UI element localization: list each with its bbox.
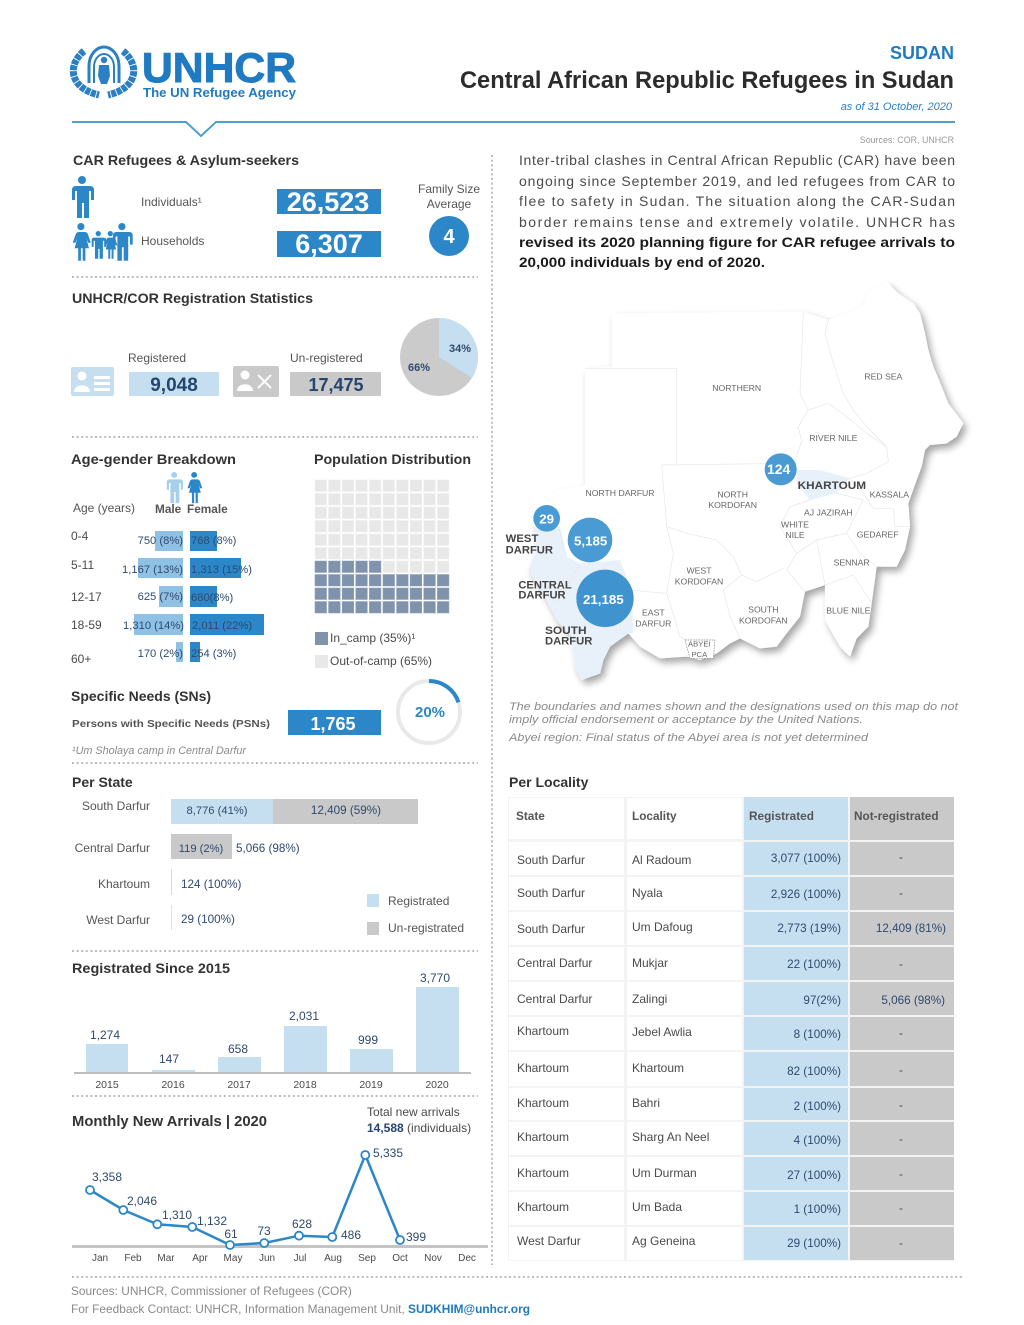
table states: Khartoum bbox=[517, 1096, 569, 1110]
highlighted state labels bbox=[506, 480, 866, 647]
bubbles: 29 bbox=[539, 511, 554, 526]
table not-registrated values: - bbox=[899, 1236, 903, 1250]
panel: registrated since 2015 bbox=[72, 960, 471, 1091]
state labels: BLUE NILE bbox=[826, 605, 871, 615]
donut chart bbox=[398, 681, 460, 743]
table header: State bbox=[516, 809, 545, 823]
table registrated values: 27 (100%) bbox=[787, 1169, 841, 1182]
population pyramid: 680(8%) bbox=[191, 592, 234, 604]
icon: UNHCR wreath and sheltering hands bbox=[73, 47, 134, 95]
line chart: 61 bbox=[224, 1227, 238, 1241]
highlighted state labels: KHARTOUM bbox=[798, 480, 866, 492]
axis labels bbox=[73, 501, 228, 516]
table localities: Nyala bbox=[632, 886, 663, 900]
axis labels: Male bbox=[155, 502, 182, 516]
table not-registrated values: - bbox=[899, 1026, 903, 1040]
map disclaimer: imply official endorsement or acceptance by the United Nations. bbox=[509, 714, 863, 726]
table states: Khartoum bbox=[517, 1200, 569, 1214]
population pyramid bbox=[71, 529, 264, 666]
row: Khartoum: Khartoum bbox=[98, 877, 150, 891]
state labels bbox=[585, 371, 909, 659]
table localities: Ag Geneina bbox=[632, 1234, 696, 1248]
row: Central Darfur: 119 (2%) bbox=[179, 843, 224, 855]
table header: Locality bbox=[632, 809, 677, 823]
icon: registered card bbox=[71, 367, 114, 396]
stat: PSNs bbox=[288, 710, 381, 735]
line chart: 2,046 bbox=[127, 1194, 157, 1208]
population pyramid: 12-17 bbox=[71, 590, 102, 604]
heading: UNHCR/COR Registration Statistics bbox=[72, 290, 313, 306]
line chart: 1,132 bbox=[197, 1214, 227, 1228]
line chart: 486 bbox=[341, 1228, 361, 1242]
map disclaimer: The boundaries and names shown and the designations used on this map do not bbox=[509, 701, 959, 713]
date: as of 31 October, 2020 bbox=[841, 101, 953, 113]
line chart: Dec bbox=[458, 1253, 476, 1264]
bubbles: 5,185 bbox=[574, 533, 608, 548]
table states: South Darfur bbox=[517, 886, 585, 900]
stat: PSNs: 1,765 bbox=[310, 714, 356, 734]
icon: female bbox=[187, 472, 202, 503]
line chart: 3,358 bbox=[92, 1170, 122, 1184]
line chart: Apr bbox=[192, 1253, 208, 1264]
intro paragraph bbox=[519, 152, 955, 270]
heading: Specific Needs (SNs) bbox=[71, 688, 211, 704]
line chart: 1,310 bbox=[162, 1208, 192, 1222]
population pyramid: 1,310 (14%) bbox=[123, 620, 184, 632]
bubbles bbox=[533, 453, 797, 627]
highlighted state labels: CENTRAL bbox=[518, 579, 572, 591]
bubbles: 124 bbox=[767, 461, 791, 477]
population pyramid: 750 (8%) bbox=[138, 535, 183, 547]
intro paragraph: flee to safety in Sudan. The situation along the CAR-Sudan bbox=[519, 193, 955, 209]
table registrated values: 2,926 (100%) bbox=[771, 888, 841, 901]
footnote: ¹Um Sholaya camp in Central Darfur bbox=[72, 745, 246, 757]
line chart: Oct bbox=[392, 1253, 408, 1264]
table localities: Um Durman bbox=[632, 1166, 697, 1180]
population pyramid: 60+ bbox=[71, 652, 91, 666]
table states: South Darfur bbox=[517, 853, 585, 867]
highlighted state labels: WEST bbox=[506, 533, 538, 545]
state labels: RED SEA bbox=[864, 371, 903, 381]
stat: individuals: 26,523 bbox=[287, 187, 369, 217]
logo tagline: The UN Refugee Agency bbox=[143, 85, 297, 100]
highlighted state labels: DARFUR bbox=[506, 544, 553, 556]
waffle legend bbox=[315, 631, 432, 668]
state labels: PCA bbox=[691, 650, 708, 659]
row: West Darfur: 29 (100%) bbox=[181, 913, 235, 926]
state labels: KASSALA bbox=[870, 489, 909, 499]
state labels: NORTH bbox=[717, 490, 748, 500]
population pyramid: 0-4 bbox=[71, 529, 89, 543]
table not-registrated values bbox=[876, 850, 946, 1250]
intro paragraph: revised its 2020 planning figure for CAR refugee arrivals to bbox=[519, 234, 955, 250]
table localities: Mukjar bbox=[632, 956, 668, 970]
heading: CAR Refugees & Asylum-seekers bbox=[73, 152, 299, 168]
total arrivals note: Total new arrivals bbox=[367, 1105, 460, 1119]
bar chart: 2019 bbox=[359, 1079, 383, 1091]
stat: registered: 9,048 bbox=[150, 375, 198, 396]
table registrated values: 2 (100%) bbox=[794, 1100, 841, 1113]
bar chart: 147 bbox=[159, 1052, 179, 1066]
bar chart: 2016 bbox=[161, 1079, 185, 1091]
state labels: DARFUR bbox=[635, 619, 671, 629]
table states: Central Darfur bbox=[517, 992, 592, 1006]
line chart: Feb bbox=[124, 1253, 142, 1264]
state labels: SOUTH bbox=[748, 604, 778, 614]
bar chart: 2020 bbox=[425, 1079, 449, 1091]
table localities: Um Dafoug bbox=[632, 920, 693, 934]
waffle legend: In_camp (35%)¹ bbox=[330, 631, 415, 645]
bar chart: 3,770 bbox=[420, 971, 450, 985]
panel: per locality table bbox=[508, 774, 954, 1261]
population pyramid: 18-59 bbox=[71, 618, 102, 632]
state labels: NORTH DARFUR bbox=[585, 488, 655, 498]
icon: individual bbox=[72, 176, 94, 218]
panel: population distribution bbox=[314, 451, 471, 668]
state labels: KORDOFAN bbox=[708, 500, 757, 510]
table registrated values bbox=[771, 852, 841, 1250]
table localities bbox=[632, 853, 709, 1248]
Abyei PCA box bbox=[685, 640, 715, 658]
panel: map of Sudan bbox=[506, 282, 963, 680]
line chart bbox=[72, 1146, 488, 1264]
state labels: RIVER NILE bbox=[809, 433, 858, 443]
header bbox=[72, 43, 955, 145]
table registrated values: 3,077 (100%) bbox=[771, 852, 841, 865]
logo wordmark: UNHCR bbox=[142, 44, 296, 91]
table localities: Bahri bbox=[632, 1096, 660, 1110]
panel: per state bbox=[72, 774, 464, 935]
table registrated values: 82 (100%) bbox=[787, 1065, 841, 1078]
footer sources: Sources: UNHCR, Commissioner of Refugees (COR) bbox=[71, 1284, 352, 1298]
stat: unregistered: 17,475 bbox=[308, 375, 364, 395]
pie chart: 34% bbox=[449, 343, 471, 355]
icon: male bbox=[167, 472, 183, 503]
family size average: Family Size bbox=[418, 182, 480, 196]
table localities: Jebel Awlia bbox=[632, 1025, 692, 1039]
line chart: Jun bbox=[259, 1253, 275, 1264]
table states bbox=[517, 853, 592, 1248]
table not-registrated values: - bbox=[899, 1098, 903, 1112]
heading: Population Distribution bbox=[314, 451, 471, 467]
panel: registration statistics bbox=[71, 290, 478, 397]
heading: Age-gender Breakdown bbox=[71, 451, 236, 467]
total arrivals note bbox=[367, 1105, 471, 1135]
table not-registrated values: - bbox=[899, 1063, 903, 1077]
state labels: KORDOFAN bbox=[739, 615, 788, 625]
table registrated values: 4 (100%) bbox=[794, 1134, 841, 1147]
icon: unregistered card bbox=[233, 366, 279, 397]
panel: monthly new arrivals bbox=[72, 1105, 488, 1264]
table registrated values: 1 (100%) bbox=[794, 1203, 841, 1216]
table localities: Zalingi bbox=[632, 992, 667, 1006]
intro paragraph: ongoing since September 2019, and led refugees from CAR to bbox=[519, 173, 955, 189]
table states: Khartoum bbox=[517, 1024, 569, 1038]
line chart: Mar bbox=[157, 1253, 175, 1264]
header rule with chevron bbox=[72, 122, 955, 136]
map landmass bbox=[528, 282, 963, 680]
row: West Darfur bbox=[86, 905, 235, 930]
stat: households bbox=[277, 229, 381, 259]
sources note: Sources: COR, UNHCR bbox=[860, 135, 954, 145]
row: Central Darfur: 5,066 (98%) bbox=[236, 842, 300, 855]
population pyramid: 5-11 bbox=[71, 558, 94, 572]
highlighted state labels: SOUTH bbox=[545, 625, 587, 637]
table states: West Darfur bbox=[517, 1234, 581, 1248]
table registrated values: 8 (100%) bbox=[794, 1028, 841, 1041]
panel: age-gender breakdown bbox=[71, 451, 264, 666]
intro paragraph: border remains tense and extremely volatile. UNHCR has bbox=[519, 214, 955, 230]
table localities: Khartoum bbox=[632, 1061, 684, 1075]
bar chart: 2017 bbox=[227, 1079, 251, 1091]
heading: Registrated Since 2015 bbox=[72, 960, 230, 976]
table registrated values: 97(2%) bbox=[803, 994, 841, 1007]
population pyramid: 768 (8%) bbox=[191, 535, 237, 547]
table registrated values: 29 (100%) bbox=[787, 1237, 841, 1250]
heading: Per State bbox=[72, 774, 133, 790]
footer bbox=[71, 1284, 530, 1316]
row: South Darfur: South Darfur bbox=[82, 799, 150, 813]
panel: CAR refugees and asylum-seekers bbox=[72, 152, 480, 261]
intro paragraph: 20,000 individuals by end of 2020. bbox=[519, 254, 765, 270]
state labels: NILE bbox=[785, 530, 805, 540]
state labels: NORTHERN bbox=[712, 383, 761, 393]
stat: unregistered bbox=[290, 372, 381, 396]
bar chart: 1,274 bbox=[90, 1028, 120, 1042]
table states: Khartoum bbox=[517, 1130, 569, 1144]
table states: Khartoum bbox=[517, 1166, 569, 1180]
state borders bbox=[557, 312, 910, 640]
donut chart: 20% bbox=[415, 704, 445, 721]
state labels: WHITE bbox=[781, 520, 809, 530]
heading: Monthly New Arrivals | 2020 bbox=[72, 1113, 267, 1130]
row: West Darfur: West Darfur bbox=[86, 913, 150, 927]
bar chart: 2018 bbox=[293, 1079, 317, 1091]
stat: registered bbox=[129, 372, 219, 396]
table not-registrated values: - bbox=[899, 1167, 903, 1181]
line chart: 399 bbox=[406, 1230, 426, 1244]
population pyramid: 2,011 (22%) bbox=[192, 620, 252, 632]
state labels: EAST bbox=[642, 608, 665, 618]
highlighted state labels: DARFUR bbox=[545, 635, 592, 647]
map disclaimer bbox=[508, 701, 959, 744]
table states: South Darfur bbox=[517, 922, 585, 936]
line chart: Aug bbox=[324, 1253, 342, 1264]
table registrated values: 2,773 (19%) bbox=[777, 922, 841, 935]
waffle chart bbox=[315, 480, 449, 613]
state labels: WEST bbox=[686, 565, 712, 575]
family size average: Average bbox=[427, 197, 472, 211]
row: South Darfur bbox=[82, 799, 418, 824]
state labels: AJ JAZIRAH bbox=[804, 508, 853, 518]
panel: specific needs bbox=[71, 681, 460, 757]
row: Central Darfur bbox=[75, 834, 300, 859]
row: Khartoum: 124 (100%) bbox=[181, 878, 242, 891]
table registrated values: 22 (100%) bbox=[787, 958, 841, 971]
axis labels: Age (years) bbox=[73, 501, 135, 515]
table header bbox=[516, 809, 939, 823]
highlighted Khartoum state bbox=[797, 470, 850, 500]
row: South Darfur: 8,776 (41%) bbox=[187, 805, 248, 817]
highlighted state labels: DARFUR bbox=[518, 590, 566, 602]
population pyramid: 1,167 (13%) bbox=[122, 564, 183, 576]
legend: Registrated bbox=[388, 894, 449, 908]
table grid bbox=[508, 797, 954, 1261]
table states: Central Darfur bbox=[517, 956, 592, 970]
table states: Khartoum bbox=[517, 1061, 569, 1075]
legend bbox=[367, 894, 464, 935]
table localities: Al Radoum bbox=[632, 853, 691, 867]
highlighted Darfur states bbox=[528, 527, 633, 680]
title: Central African Republic Refugees in Sudan bbox=[460, 67, 954, 94]
state labels: SENNAR bbox=[834, 558, 870, 568]
label: registered: Registered bbox=[128, 351, 186, 365]
pie chart: 66% bbox=[408, 362, 430, 374]
heading: Per Locality bbox=[509, 774, 589, 790]
line chart: Jul bbox=[294, 1253, 306, 1264]
population pyramid: 254 (3%) bbox=[191, 648, 237, 660]
table not-registrated values: 12,409 (81%) bbox=[876, 922, 946, 935]
family size average bbox=[418, 182, 480, 256]
bar chart bbox=[74, 971, 471, 1091]
axis labels: Female bbox=[187, 502, 228, 516]
line chart: Nov bbox=[424, 1253, 442, 1264]
bubbles: 21,185 bbox=[583, 592, 624, 607]
population pyramid: 170 (2%) bbox=[138, 648, 183, 660]
PSN label: Persons with Specific Needs (PSNs) bbox=[72, 718, 270, 730]
map disclaimer: Abyei region: Final status of the Abyei area is not yet determined bbox=[508, 732, 869, 744]
bar chart: 2,031 bbox=[289, 1009, 319, 1023]
UNHCR logo bbox=[73, 44, 297, 100]
table not-registrated values: - bbox=[899, 957, 903, 971]
intro paragraph: Inter-tribal clashes in Central African Republic (CAR) have been bbox=[519, 152, 955, 168]
population pyramid: 1,313 (15%) bbox=[191, 564, 252, 576]
icon: household bbox=[73, 223, 133, 261]
table not-registrated values: - bbox=[899, 1201, 903, 1215]
table not-registrated values: - bbox=[899, 886, 903, 900]
row: South Darfur: 12,409 (59%) bbox=[311, 804, 381, 817]
row: Khartoum bbox=[98, 869, 242, 895]
state labels: KORDOFAN bbox=[675, 576, 723, 586]
table header: Not-registrated bbox=[854, 809, 939, 823]
label: households: Households bbox=[141, 234, 204, 248]
line chart: May bbox=[224, 1253, 242, 1264]
table localities: Sharg An Neel bbox=[632, 1130, 709, 1144]
line chart: 628 bbox=[292, 1217, 312, 1231]
line chart: 5,335 bbox=[373, 1146, 403, 1160]
stat: households: 6,307 bbox=[295, 229, 363, 259]
table localities: Um Bada bbox=[632, 1200, 682, 1214]
country label: SUDAN bbox=[890, 43, 954, 63]
total arrivals note: 14,588 (individuals) bbox=[367, 1121, 471, 1135]
bar chart: 658 bbox=[228, 1042, 248, 1056]
line chart: Jan bbox=[92, 1253, 108, 1264]
line chart: Sep bbox=[358, 1253, 376, 1264]
table not-registrated values: - bbox=[899, 1132, 903, 1146]
label: individuals: Individuals¹ bbox=[141, 195, 202, 209]
line chart: 73 bbox=[257, 1224, 271, 1238]
footer contact: For Feedback Contact: UNHCR, Information Management Unit, SUDKHIM@unhcr.org bbox=[71, 1302, 530, 1316]
row: Central Darfur: Central Darfur bbox=[75, 841, 150, 855]
state labels: GEDAREF bbox=[857, 529, 899, 539]
table not-registrated values: - bbox=[899, 850, 903, 864]
bar chart: 999 bbox=[358, 1033, 378, 1047]
waffle legend: Out-of-camp (65%) bbox=[330, 654, 432, 668]
pie chart bbox=[400, 318, 478, 396]
population pyramid: 625 (7%) bbox=[138, 591, 183, 603]
family size average: 4 bbox=[443, 226, 455, 248]
label: unregistered: Un-registered bbox=[290, 351, 363, 365]
bar chart: 2015 bbox=[95, 1079, 119, 1091]
table header: Registrated bbox=[749, 809, 814, 823]
legend: Un-registrated bbox=[388, 921, 464, 935]
table not-registrated values: 5,066 (98%) bbox=[881, 994, 945, 1007]
state labels: ABYEI bbox=[688, 640, 711, 649]
